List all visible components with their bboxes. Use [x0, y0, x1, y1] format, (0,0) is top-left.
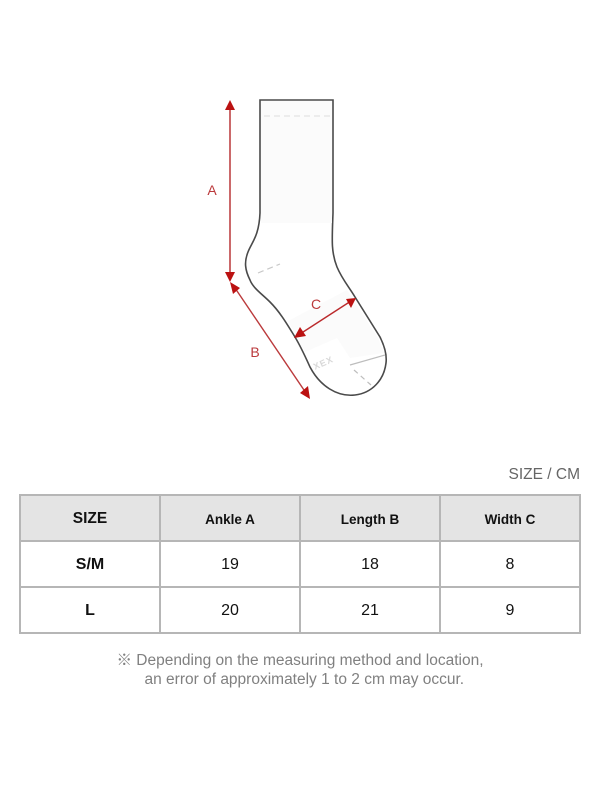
size table: 9 [506, 602, 514, 619]
size table: 20 [221, 602, 239, 619]
arrow C [294, 298, 356, 338]
size table [19, 494, 581, 634]
ribbed cuff shading [261, 101, 332, 223]
size table: 19 [221, 556, 239, 573]
ribbed arch shading [288, 290, 384, 358]
footnote: an error of approximately 1 to 2 cm may occur. [144, 671, 464, 688]
footnote: ※ Depending on the measuring method and location, [116, 652, 484, 669]
ankle dashed line [258, 264, 280, 273]
size table: Length B [341, 512, 399, 526]
unit label: SIZE / CM [509, 466, 580, 483]
size table: SIZE [73, 510, 107, 527]
sock measurement diagram [207, 99, 387, 399]
toe seam [350, 355, 385, 365]
sock outline [246, 100, 386, 395]
size table: Width C [485, 512, 535, 526]
sock logo mark: XEX [312, 354, 335, 372]
label A: A [207, 182, 217, 198]
arrow A [225, 100, 235, 282]
arrow B [230, 282, 310, 399]
size table: 21 [361, 602, 379, 619]
toe dashed line [354, 370, 371, 385]
label C: C [311, 296, 321, 312]
size table: Ankle A [205, 512, 255, 526]
size table: 18 [361, 556, 379, 573]
size table: L [85, 602, 95, 619]
label B: B [250, 344, 260, 360]
cuff dashed line [264, 115, 332, 117]
size table: 8 [506, 556, 514, 573]
size table: S/M [76, 556, 104, 573]
footnote [116, 652, 484, 688]
